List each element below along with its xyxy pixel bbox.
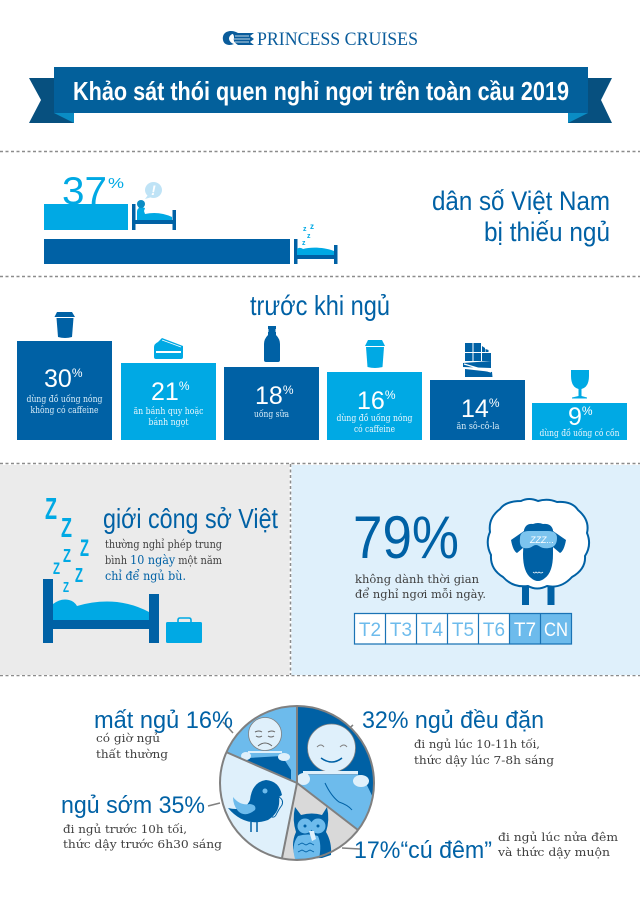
text: leave days: thường nghỉ phép trung bbox=[105, 538, 222, 551]
bar: 14 percent chocolate: ăn sô-cô-la bbox=[456, 421, 500, 432]
sleep deprivation comparison bbox=[44, 170, 610, 264]
bar: 16 percent hot drink with caffeine: % bbox=[385, 388, 396, 402]
label: early sleeper 35 percent: ngủ sớm 35% bbox=[61, 792, 205, 819]
icon: bed with sleeping person: z bbox=[303, 226, 307, 233]
label: night owl 17 percent: đi ngủ lúc nửa đêm bbox=[498, 830, 618, 844]
weekday boxes: T2 bbox=[359, 620, 381, 641]
weekday boxes bbox=[354, 614, 572, 644]
bar: 16 percent hot drink with caffeine: có caffeine bbox=[354, 424, 395, 435]
wedge: 35 percent early bird bbox=[220, 752, 297, 858]
bar: 21 percent biscuits: ăn bánh quy hoặc bbox=[134, 406, 204, 417]
icon: sheep with sleep mask bbox=[488, 499, 589, 605]
label: night owl 17 percent bbox=[354, 830, 618, 864]
bar: 21 percent biscuits: % bbox=[179, 379, 190, 393]
label: insomnia 16 percent: có giờ ngủ bbox=[96, 731, 160, 745]
weekday boxes: T7 bbox=[514, 620, 536, 641]
icon: bed bbox=[43, 579, 159, 643]
text: leave days: chỉ để ngủ bù. bbox=[105, 568, 186, 583]
text: leave days: bình 10 ngày một năm bbox=[105, 552, 223, 567]
bar: 30 percent hot drink no caffeine: 30 bbox=[44, 365, 72, 393]
label: insomnia 16 percent bbox=[94, 707, 233, 761]
bar: 14 percent chocolate bbox=[430, 380, 525, 440]
weekday boxes: T6 bbox=[483, 620, 505, 641]
37 percent figure bbox=[62, 170, 124, 213]
bar: 18 percent milk: % bbox=[283, 383, 294, 397]
label: early sleeper 35 percent: thức dậy trước 6h30 sáng bbox=[63, 837, 223, 851]
bar: 30 percent hot drink no caffeine: không có caffeine bbox=[30, 405, 98, 416]
icon: wine glass bbox=[571, 370, 589, 398]
label: early sleeper 35 percent: đi ngủ trước 10h tối, bbox=[63, 822, 187, 836]
label: insomnia 16 percent: mất ngủ 16% bbox=[94, 707, 233, 734]
weekday boxes: T3 bbox=[390, 620, 412, 641]
bar: 9 percent alcohol bbox=[532, 403, 627, 440]
sleep deprivation comparison: bị thiếu ngủ bbox=[484, 217, 610, 247]
icon: early bird bbox=[228, 780, 283, 832]
sleeping Zs: Z bbox=[53, 559, 60, 578]
pie chart: sleeper types bbox=[208, 706, 374, 860]
label: regular sleeper 32 percent: thức dậy lúc 7-8h sáng bbox=[414, 753, 555, 767]
weekday boxes: T4 bbox=[421, 620, 444, 641]
text: Vietnamese population: dân số Việt Nam bbox=[432, 186, 610, 216]
wedge: 16 percent insomnia bbox=[226, 706, 297, 783]
text: no daily rest time: để nghỉ ngơi mỗi ngày. bbox=[355, 587, 486, 601]
wedge: 17 percent night owl bbox=[282, 783, 358, 860]
sleeping Zs: Z bbox=[45, 491, 57, 526]
leader lines bbox=[208, 722, 360, 849]
weekday boxes: CN bbox=[544, 620, 568, 641]
bar: 18 percent milk bbox=[224, 367, 319, 440]
icon: cake slice bbox=[154, 338, 183, 359]
short sleep bar bbox=[44, 204, 128, 230]
bar: 18 percent milk: uống sữa bbox=[254, 409, 289, 420]
heading: before sleep: trước khi ngủ bbox=[250, 290, 390, 321]
panel: no rest time bbox=[292, 465, 640, 675]
icon: bed with sleeping person: z bbox=[310, 222, 314, 231]
bar: 9 percent alcohol: 9 bbox=[568, 403, 582, 431]
sleeping Zs bbox=[45, 491, 89, 596]
bar: 18 percent milk: 18 bbox=[255, 382, 283, 410]
text: no daily rest time bbox=[355, 572, 486, 601]
long sleep bar bbox=[44, 239, 290, 264]
icon: happy sleeper bbox=[297, 724, 373, 830]
37 percent figure: % bbox=[108, 175, 124, 192]
bar: 21 percent biscuits: bánh ngọt bbox=[148, 417, 189, 428]
sleeping Zs: Z bbox=[75, 565, 83, 587]
weekday boxes: T5 bbox=[452, 620, 474, 641]
label: night owl 17 percent: và thức dậy muộn bbox=[497, 845, 611, 859]
label: regular sleeper 32 percent bbox=[362, 707, 555, 767]
bar: 21 percent biscuits bbox=[121, 363, 216, 440]
label: night owl 17 percent: 17%“cú đêm” bbox=[354, 837, 492, 864]
text: leave days bbox=[105, 538, 223, 583]
bar: 16 percent hot drink with caffeine: dùng đồ uống nóng bbox=[336, 413, 413, 424]
icon: bed with sleeping person bbox=[294, 222, 338, 264]
bar: 9 percent alcohol: % bbox=[582, 404, 593, 418]
icon: bed with sleeping person: z bbox=[307, 233, 311, 240]
icon: dark coffee cup bbox=[54, 312, 75, 338]
panel: office workers bbox=[0, 465, 290, 675]
bar: 21 percent biscuits: 21 bbox=[151, 378, 179, 406]
icon: night owl bbox=[293, 807, 331, 859]
icon: light coffee cup bbox=[365, 340, 385, 368]
bar: 30 percent hot drink no caffeine: dùng đồ uống nóng bbox=[26, 394, 103, 405]
icon: bed with sleeping person: z bbox=[302, 240, 306, 247]
bar: 30 percent hot drink no caffeine: % bbox=[72, 366, 83, 380]
figure: 79 percent: 79% bbox=[353, 504, 459, 571]
label: early sleeper 35 percent bbox=[61, 792, 223, 851]
label: insomnia 16 percent: thất thường bbox=[96, 747, 169, 761]
sleeping Zs: Z bbox=[63, 579, 69, 596]
title ribbon bbox=[29, 67, 612, 123]
icon: suitcase bbox=[166, 618, 202, 643]
wedge: 32 percent regular bbox=[297, 706, 374, 830]
logo: Princess Cruises: PRINCESS CRUISES bbox=[257, 30, 418, 50]
icon: bed with awake person bbox=[132, 182, 176, 230]
icon: bed with awake person: ! bbox=[151, 182, 156, 198]
sleeping Zs: Z bbox=[63, 546, 71, 566]
heading: Vietnamese office workers: giới công sở Việt bbox=[103, 503, 278, 534]
bar: 16 percent hot drink with caffeine bbox=[327, 372, 422, 440]
bar: 30 percent hot drink no caffeine bbox=[17, 341, 112, 440]
icon: tired sleeper bbox=[241, 718, 291, 780]
bar: 16 percent hot drink with caffeine: 16 bbox=[357, 387, 385, 415]
bar: 14 percent chocolate: 14 bbox=[461, 395, 489, 423]
sleeping Zs: Z bbox=[61, 512, 72, 543]
icon: sheep with sleep mask: ZZZ... bbox=[529, 535, 554, 545]
sleeping Zs: Z bbox=[80, 535, 89, 562]
label: regular sleeper 32 percent: đi ngủ lúc 10-11h tối, bbox=[414, 737, 540, 751]
bar: 9 percent alcohol: dùng đồ uống có cồn bbox=[540, 428, 620, 439]
pie outline and dividers bbox=[226, 706, 358, 858]
37 percent figure: 37 bbox=[62, 170, 107, 213]
bar: 14 percent chocolate: % bbox=[489, 396, 500, 410]
icon: chocolate bar bbox=[463, 343, 492, 377]
icon: milk bottle bbox=[264, 326, 280, 362]
label: regular sleeper 32 percent: 32% ngủ đều đặn bbox=[362, 707, 544, 734]
text: no daily rest time: không dành thời gian bbox=[355, 572, 480, 586]
